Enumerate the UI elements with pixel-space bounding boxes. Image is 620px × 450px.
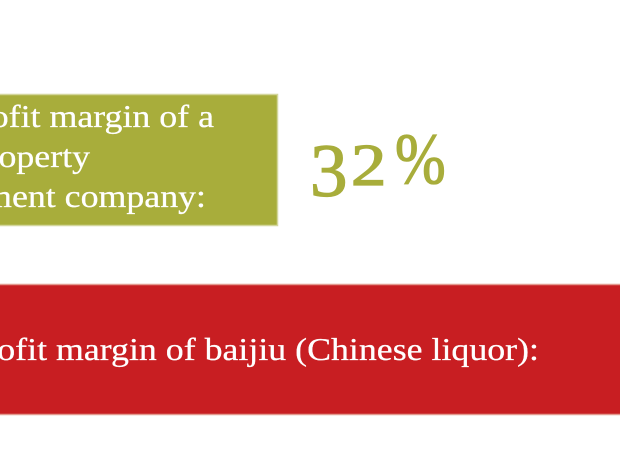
panel: property company margin (0, 94, 278, 226)
value: 32 percent: 2 (351, 133, 386, 199)
olive box (0, 94, 278, 226)
label: property development company (0, 100, 214, 215)
value: 32 percent: % (395, 120, 446, 199)
value: 32 percent (310, 120, 446, 213)
value: 32 percent: 3 (310, 130, 348, 213)
panel: baijiu margin (0, 284, 620, 414)
red box (0, 284, 620, 414)
